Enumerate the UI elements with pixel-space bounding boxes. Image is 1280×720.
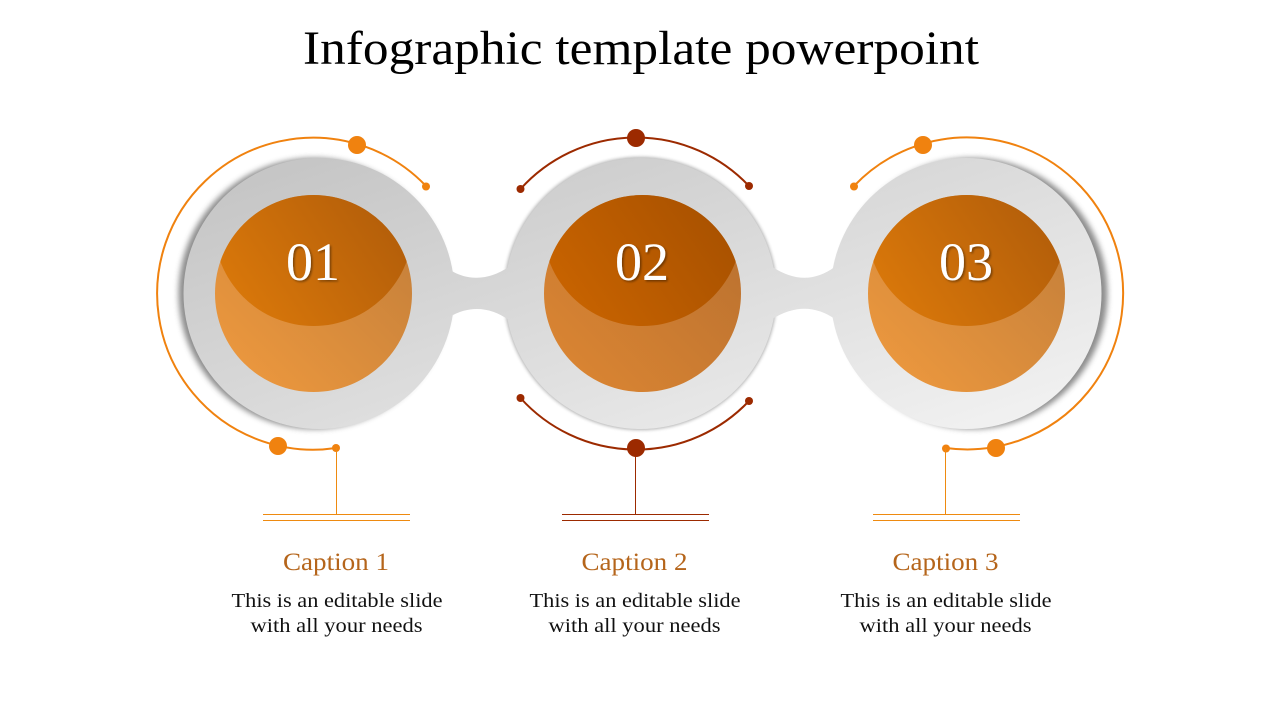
text block: caption 1 [232,549,442,637]
text block: caption 3 [840,549,1052,637]
text block: caption 3: with all your needs [860,615,1032,637]
title: Infographic template powerpoint [303,22,980,75]
number 01: 01 [286,232,340,292]
grey shadows behind the linked circles [178,157,1108,430]
ring: dark red arcs centre [516,129,753,457]
connector 2 [562,448,709,520]
circle 3 [868,195,1065,392]
text block: caption 2 [530,549,740,637]
text block: caption 1: Caption 1 [283,549,389,576]
text block: caption 2: with all your needs [548,615,721,637]
circle 2 [544,195,741,392]
text block: caption 1: This is an editable slide [232,590,442,612]
ring: orange arc left [157,136,430,455]
text block: caption 1: with all your needs [250,615,423,637]
connector 3 [873,448,1020,520]
number 02: 02 [615,232,669,292]
connector 1 [263,448,410,520]
text block: caption 2: Caption 2 [582,549,688,576]
text block: caption 3: This is an editable slide [840,590,1052,612]
text block: caption 3: Caption 3 [892,549,998,576]
circle 1 [215,195,412,392]
linked grey circles [184,158,1102,429]
number 03: 03 [939,232,993,292]
text block: caption 2: This is an editable slide [530,590,740,612]
ring: orange arc right [850,136,1123,457]
